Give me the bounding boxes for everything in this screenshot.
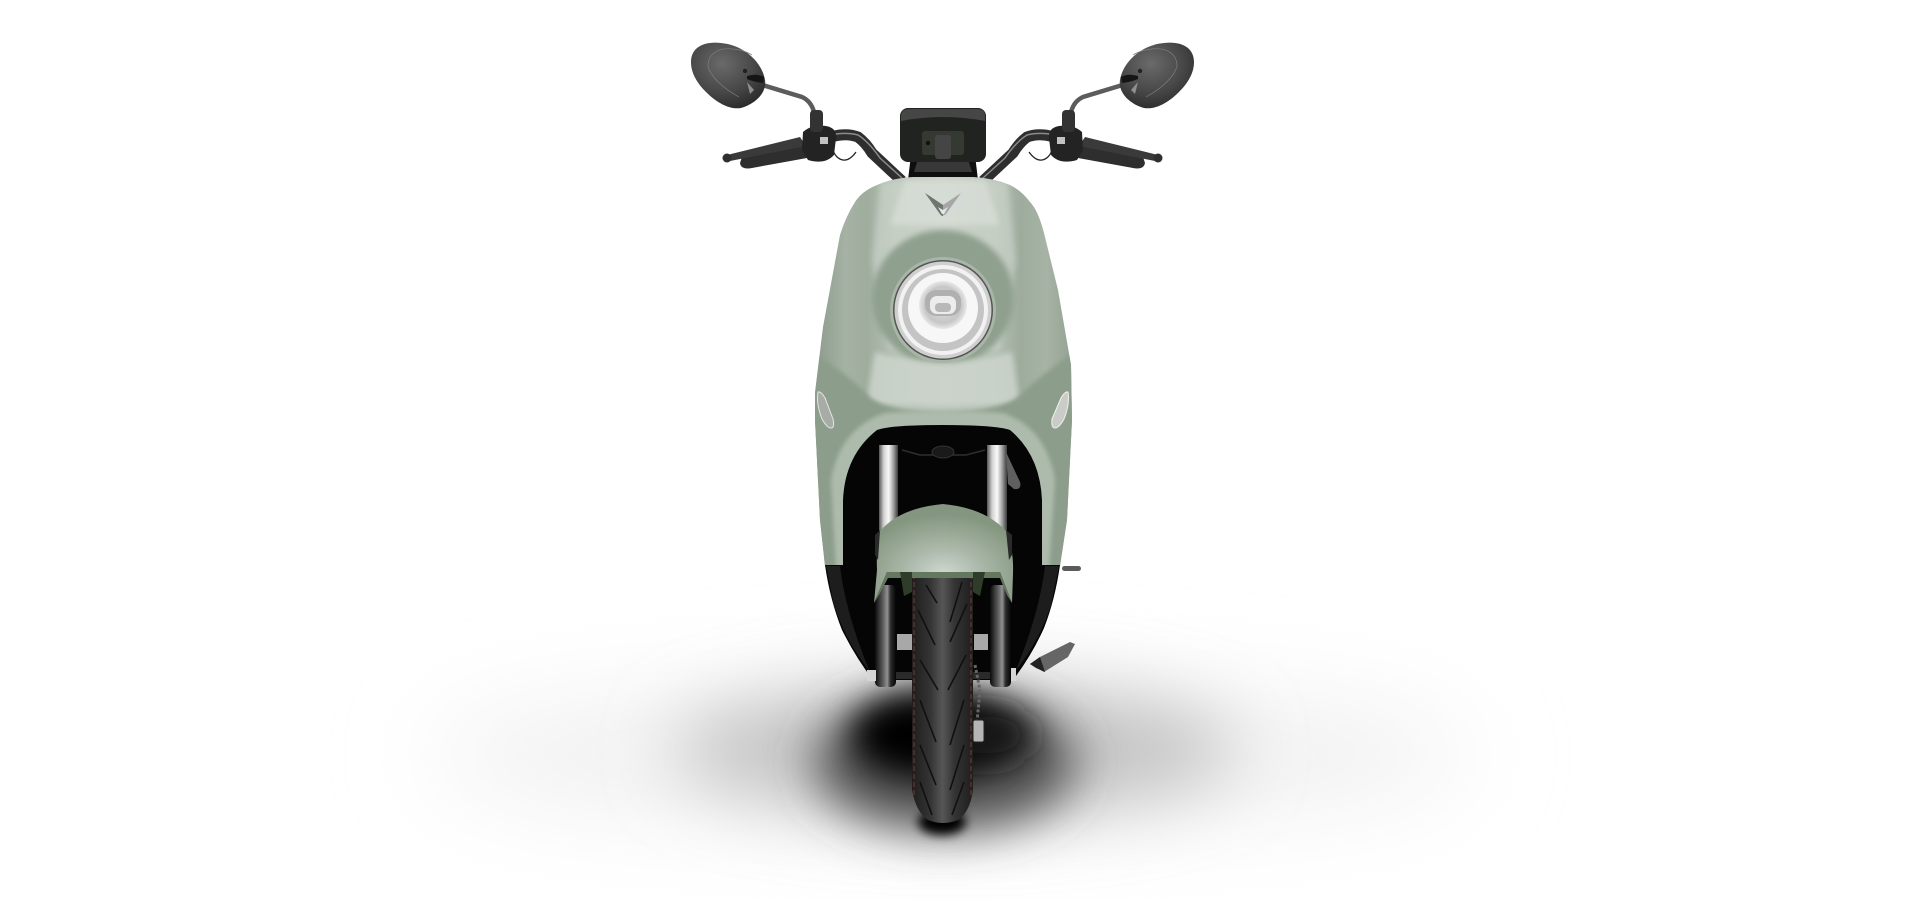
body shell — [815, 177, 1072, 566]
left handlebar, grip and lever — [722, 110, 902, 181]
side stand peg — [1062, 566, 1081, 571]
ground shadow — [430, 685, 1470, 835]
below-lamp light panel — [866, 352, 1020, 405]
brake cable and caliper — [973, 665, 984, 742]
left side badge — [818, 392, 834, 428]
right side badge — [1052, 392, 1068, 428]
front tyre — [912, 572, 973, 823]
lower side panels — [815, 354, 1072, 566]
right mirror and stalk — [1069, 43, 1194, 126]
instrument display and mount — [900, 108, 986, 180]
upper centre highlight — [872, 176, 1016, 350]
folding foot peg — [1030, 642, 1075, 672]
front opening and black lower shell — [825, 425, 1060, 680]
fork lower legs — [867, 585, 1016, 687]
front fender — [874, 504, 1013, 603]
left mirror and stalk — [691, 43, 816, 126]
fork tubes — [879, 445, 1020, 535]
illustration: electric scooter front view — [515, 42, 1384, 875]
right handlebar, grip and lever — [983, 110, 1162, 181]
brand emblem — [925, 193, 961, 216]
headlamp — [890, 257, 996, 363]
headlamp bowl — [872, 230, 1014, 366]
light band round opening — [831, 410, 1055, 570]
